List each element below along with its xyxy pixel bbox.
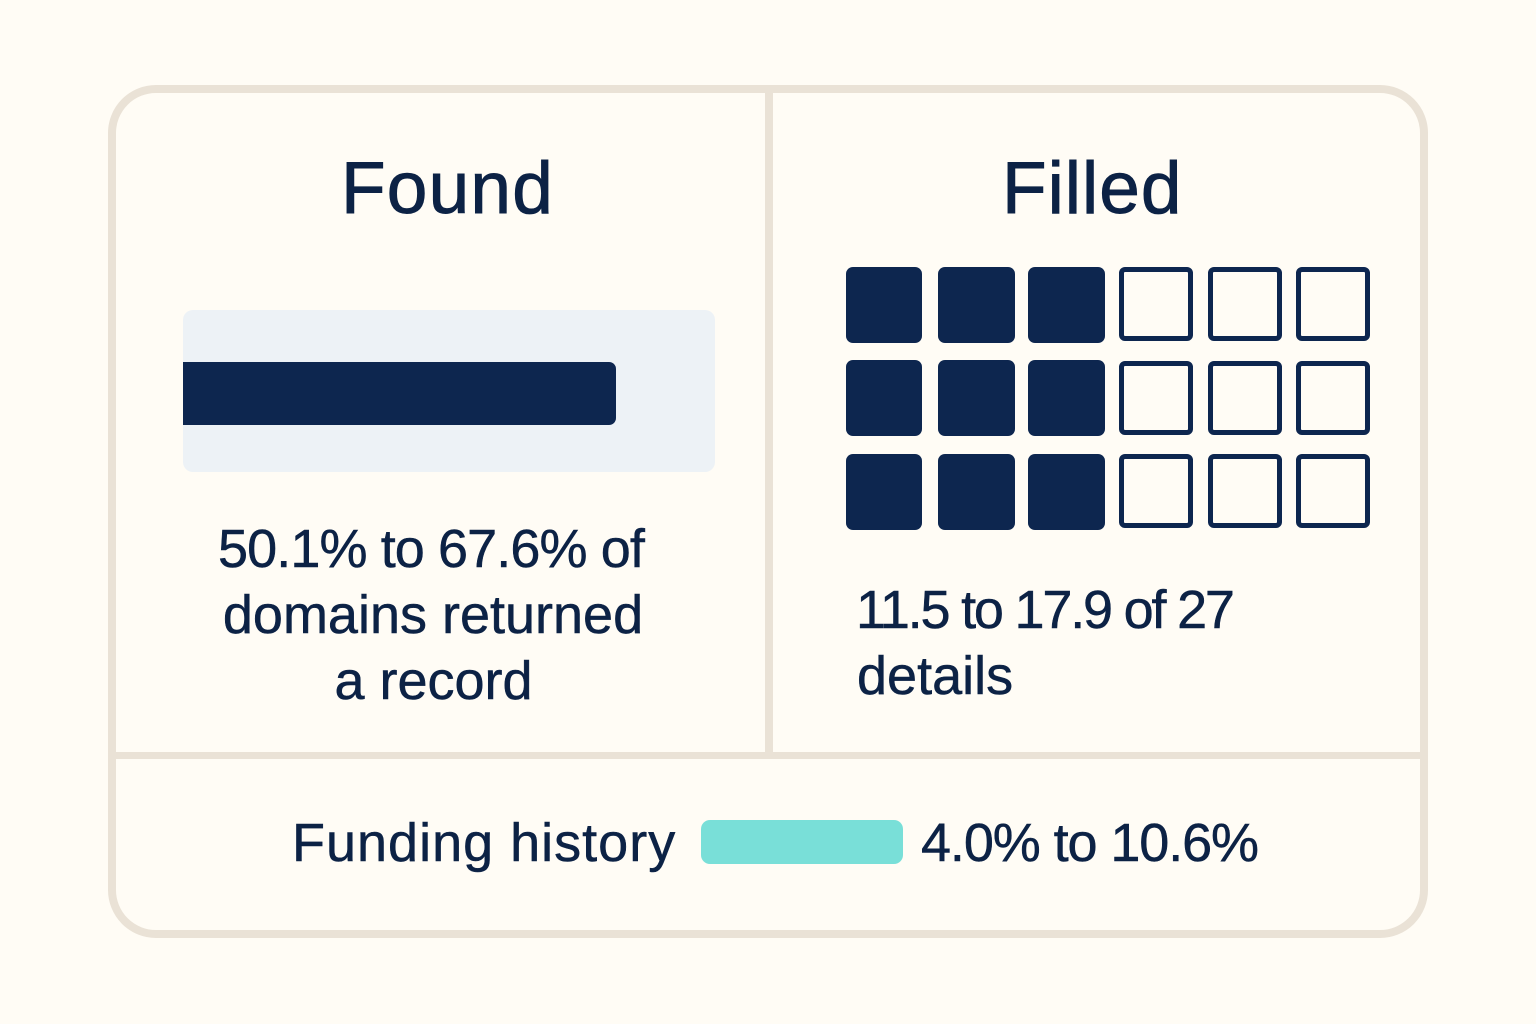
bar: funding history bbox=[701, 820, 903, 864]
text: filled description: 11.5 to 17.9 of 27 bbox=[856, 580, 1233, 640]
text: filled description: details bbox=[857, 646, 1013, 706]
chart: filled squares grid bbox=[846, 267, 1370, 530]
label: funding history: Funding history bbox=[292, 813, 676, 873]
heading: Found: Found bbox=[341, 148, 554, 229]
text: found description bbox=[218, 519, 646, 711]
text: found description: domains returned bbox=[223, 585, 643, 645]
chart: found progress bar bbox=[183, 310, 715, 472]
heading: Filled: Filled bbox=[1002, 148, 1182, 229]
bar fill bbox=[183, 362, 616, 425]
text: found description: a record bbox=[334, 651, 533, 711]
text: funding range: 4.0% to 10.6% bbox=[921, 813, 1258, 873]
text: filled description bbox=[856, 580, 1233, 706]
text: found description: 50.1% to 67.6% of bbox=[218, 519, 644, 579]
panel: outer card bbox=[108, 85, 1428, 938]
